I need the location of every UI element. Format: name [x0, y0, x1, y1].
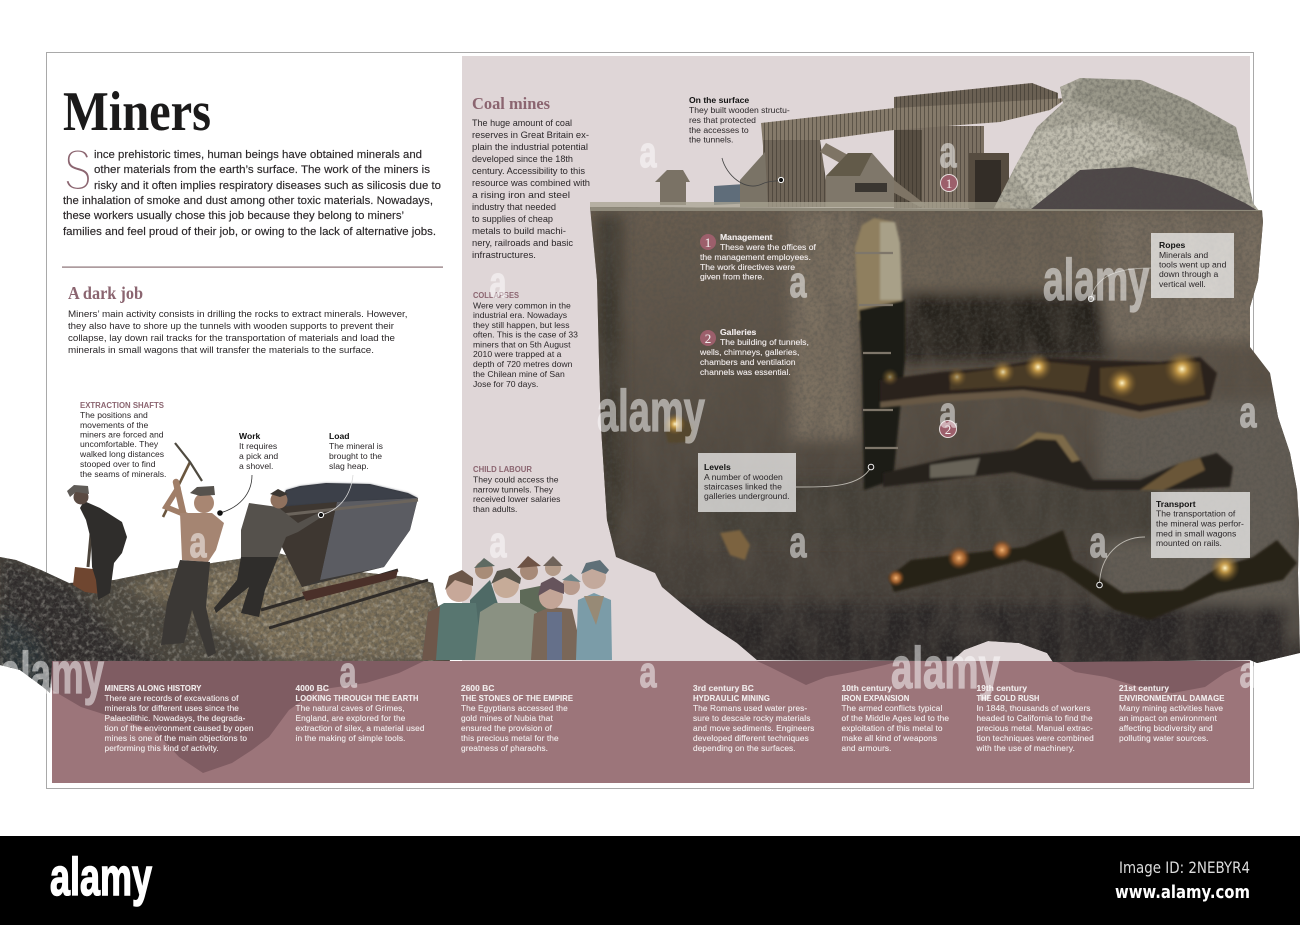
intro text block: ince prehistoric times, human beings have obtained minerals and	[94, 149, 422, 161]
coal heap	[278, 483, 418, 507]
timeline: miners along history: Palaeolithic. Nowadays, the degrada-	[104, 713, 246, 723]
callout: galleries: Galleries	[720, 327, 757, 337]
callout: galleries: chambers and ventilation	[700, 357, 796, 367]
illustration: surface buildings	[590, 75, 1265, 215]
ground and spoil heap	[0, 550, 460, 700]
timeline: 21st century: affecting biodiversity and	[1119, 723, 1213, 733]
callout: ropes: vertical well.	[1159, 279, 1206, 289]
intro text block: these workers usually chose this job because they belong to miners’	[63, 210, 404, 222]
text block: coal mines: a rising iron and steel	[472, 190, 570, 200]
left tower	[763, 140, 830, 207]
callout: transport: The transportation of	[1156, 508, 1236, 518]
text block: child labour: They could access the	[473, 474, 559, 484]
timeline: 3rd century BC: HYDRAULIC MINING	[693, 693, 770, 703]
illustration: miner with pick	[161, 443, 224, 657]
callout: extraction shafts: EXTRACTION SHAFTS	[80, 400, 164, 410]
callout: ropes: tools went up and	[1159, 260, 1227, 270]
timeline: 2600 BC: The Egyptians accessed the	[461, 703, 568, 713]
callout: extraction shafts: stooped over to find	[80, 459, 156, 469]
callout: ropes: Minerals and	[1159, 250, 1208, 260]
illustration: child miners group	[422, 556, 612, 660]
callout: work	[217, 431, 278, 516]
callout: on the surface: On the surface	[689, 95, 749, 105]
callout: levels	[698, 453, 874, 512]
callout: extraction shafts: the seams of minerals.	[80, 469, 166, 479]
right tower	[894, 126, 984, 208]
timeline: 19th century	[976, 683, 1094, 753]
stock watermarks: a	[640, 648, 657, 697]
water tank	[714, 184, 756, 205]
vertical shaft	[855, 218, 905, 490]
intro text block	[63, 138, 441, 238]
rails	[261, 570, 428, 628]
text block: a dark job	[68, 309, 407, 355]
callout: extraction shafts: uncomfortable. They	[80, 439, 159, 449]
callout: transport	[1097, 492, 1250, 588]
marker: 1 on building: 1	[946, 176, 952, 191]
timeline: 4000 BC: The natural caves of Grimes,	[296, 703, 405, 713]
callout: levels: A number of wooden	[704, 472, 783, 482]
timeline: miners along history: minerals for different uses since the	[104, 703, 239, 713]
rock texture	[585, 200, 1300, 670]
timeline: 10th century: make all kind of weapons	[842, 733, 937, 743]
text block: child labour: than adults.	[473, 504, 517, 514]
text block: coal mines: reserves in Great Britain ex-	[472, 130, 589, 140]
callout: galleries: 2	[705, 331, 711, 346]
timeline: 3rd century BC: sure to descale rocky materials	[693, 713, 810, 723]
stock watermarks: a	[640, 128, 657, 177]
panel: coal mines background	[462, 56, 1250, 661]
text block: coal mines: plain the industrial potential	[472, 142, 588, 152]
callout: management: given from there.	[700, 272, 764, 282]
text block: child labour: received lower salaries	[473, 494, 560, 504]
timeline: miners along history: MINERS ALONG HISTORY	[104, 683, 202, 693]
timeline: 2600 BC	[461, 683, 573, 753]
text block: coal mines: to supplies of cheap	[472, 214, 553, 224]
timeline: 10th century: of the Middle Ages led to the	[842, 713, 949, 723]
intro text block: other materials from the earth’s surface. The work of the miners is	[94, 164, 430, 176]
callout: management	[700, 232, 816, 282]
text block: collapses: often. This is the case of 33	[473, 330, 578, 340]
timeline: miners along history: There are records of excavations of	[104, 693, 239, 703]
callout: ropes: Ropes	[1159, 240, 1185, 250]
intro text block: the inhalation of smoke and dust among other toxic materials. Nowadays,	[63, 195, 433, 207]
timeline: 10th century: The armed conflicts typical	[842, 703, 942, 713]
text block: collapses: COLLAPSES	[473, 290, 519, 300]
footer bar	[0, 836, 1300, 925]
callout: galleries: The building of tunnels,	[720, 337, 809, 347]
callout: management: 1	[705, 235, 711, 250]
rock shadows on the timeline band	[50, 661, 1250, 773]
timeline: 21st century: Many mining activities have	[1119, 703, 1223, 713]
stock watermarks: a	[490, 258, 507, 307]
callout: load: brought to the	[329, 451, 382, 461]
timeline: 21st century: an impact on environment	[1119, 713, 1217, 723]
stock watermarks: alamy	[597, 379, 705, 444]
text block: collapses: 2010 were trapped at a	[473, 349, 562, 359]
text block: collapses: Were very common in the	[473, 300, 571, 310]
callout: levels: staircases linked the	[704, 482, 782, 492]
stock watermarks: a	[490, 518, 507, 567]
upper building	[894, 83, 1058, 112]
text block: a dark job: Miners’ main activity consists in drilling the rocks to extract minerals. However,	[68, 309, 407, 319]
timeline: 19th century: precious metal. Manual extrac-	[976, 723, 1093, 733]
footer logo: alamy	[50, 848, 152, 907]
text block: coal mines: industry that needed	[472, 202, 556, 212]
covered bridge	[761, 98, 1067, 146]
gallery 1	[880, 357, 1217, 412]
callout: on the surface: the tunnels.	[689, 134, 733, 144]
timeline: 21st century: 21st century	[1119, 683, 1169, 693]
timeline: 19th century: tion techniques were combined	[976, 733, 1094, 743]
drop cap: S	[63, 138, 92, 203]
marker: 2 in gallery: 2	[945, 422, 951, 437]
back row	[470, 556, 581, 640]
text block: coal mines: The huge amount of coal	[472, 118, 572, 128]
timeline: 10th century	[842, 683, 949, 753]
stock watermarks: alamy	[0, 641, 104, 706]
timeline: 10th century: exploitation of this metal to	[842, 723, 943, 733]
callout: extraction shafts: miners are forced and	[80, 430, 164, 440]
timeline: 2600 BC: ensured the provision of	[461, 723, 553, 733]
text block: a dark job: minerals in small wagons that will transfer the materials to the surface.	[68, 345, 374, 355]
footer image id: Image ID: 2NEBYR4	[1119, 858, 1250, 877]
callout: load: The mineral is	[329, 441, 383, 451]
timeline: 21st century	[1119, 683, 1225, 743]
callout: galleries	[699, 327, 809, 377]
callout: extraction shafts: walked long distances	[79, 449, 164, 459]
callout: load	[318, 431, 383, 518]
callout: extraction shafts: movements of the	[80, 420, 149, 430]
timeline: 4000 BC: in the making of simple tools.	[296, 733, 406, 743]
callout: load: Load	[329, 431, 350, 441]
callout: on the surface: They built wooden structu-	[689, 105, 790, 115]
stock watermarks: a	[790, 518, 807, 567]
timeline: 3rd century BC: The Romans used water pres-	[693, 703, 807, 713]
conveyor	[820, 143, 926, 207]
timeline: 10th century: and armours.	[842, 743, 892, 753]
callout: extraction shafts: The positions and	[80, 410, 148, 420]
callout: management: The work directives were	[700, 262, 795, 272]
timeline: 2600 BC: 2600 BC	[461, 683, 494, 693]
timeline: miners along history: tion of the environment caused by open	[104, 723, 254, 733]
illustration: mine wagon	[261, 483, 428, 628]
gallery 2	[883, 432, 1233, 490]
small house	[826, 153, 894, 207]
callout: levels: Levels	[704, 462, 731, 472]
stock watermarks: a	[940, 128, 957, 177]
callout: management: Management	[720, 232, 773, 242]
text block: collapses: Jose for 70 days.	[473, 379, 538, 389]
text block: coal mines: developed since the 18th	[472, 154, 573, 164]
stock watermarks: a	[1240, 648, 1257, 697]
text block: a dark job: they also have to shore up the tunnels with wooden supports to prevent their	[68, 321, 394, 331]
heading: coal mines: Coal mines	[472, 94, 550, 113]
timeline: 19th century: headed to California to find the	[976, 713, 1093, 723]
timeline: miners along history: mines is one of the main objections to	[104, 733, 247, 743]
text block: collapses	[473, 290, 578, 389]
stock watermarks: a	[940, 388, 957, 437]
text block: a dark job: collapse, lay down rail tracks for the transportation of materials and load the	[68, 333, 395, 343]
callout: on the surface	[689, 95, 790, 186]
ground strip	[590, 202, 1010, 209]
marker: 1 on building	[940, 174, 958, 192]
timeline: 19th century: THE GOLD RUSH	[976, 693, 1040, 703]
door house	[969, 153, 1009, 210]
callout: work: Work	[239, 431, 261, 441]
footer url: www.alamy.com	[1115, 882, 1250, 903]
callout: transport: the mineral was perfor-	[1156, 518, 1244, 528]
text block: child labour	[473, 464, 560, 514]
gallery 3	[889, 530, 1297, 620]
hut	[655, 170, 690, 205]
text block: child labour: narrow tunnels. They	[473, 484, 554, 494]
text block: collapses: they still happen, but less	[473, 320, 570, 330]
callout: transport: Transport	[1156, 499, 1196, 509]
callout: load: slag heap.	[329, 461, 369, 471]
timeline: 10th century: IRON EXPANSION	[842, 693, 910, 703]
callout: galleries: wells, chimneys, galleries,	[699, 347, 799, 357]
marker: 2 in gallery	[940, 420, 956, 438]
callout: on the surface: the accesses to	[689, 125, 749, 135]
timeline: 21st century: ENVIRONMENTAL DAMAGE	[1119, 693, 1225, 703]
timeline: 4000 BC: LOOKING THROUGH THE EARTH	[296, 693, 418, 703]
timeline: 3rd century BC: 3rd century BC	[693, 683, 754, 693]
text block: child labour: CHILD LABOUR	[473, 464, 533, 474]
stock watermarks: a	[1240, 388, 1257, 437]
timeline: 19th century: In 1848, thousands of workers	[976, 703, 1091, 713]
illustration: miner with shovel	[67, 485, 127, 600]
front row kids	[422, 560, 612, 660]
timeline: 4000 BC: England, are explored for the	[296, 713, 406, 723]
timeline: miners along history	[104, 683, 254, 753]
callout: work: It requires	[239, 441, 277, 451]
stock watermarks: alamy	[1043, 248, 1149, 313]
timeline: 21st century: polluting water sources.	[1119, 733, 1209, 743]
timeline: 3rd century BC	[693, 683, 814, 753]
callout: management: the management employees.	[700, 252, 811, 262]
panel: timeline band	[52, 661, 1250, 783]
callout: ropes	[1088, 233, 1234, 302]
callout: work: a shovel.	[239, 461, 273, 471]
text block: coal mines: nery, railroads and basic	[472, 238, 573, 248]
text block: collapses: the Chilean mine of San	[473, 369, 565, 379]
timeline: 3rd century BC: and move sediments. Engineers	[693, 723, 814, 733]
timeline: 2600 BC: this precious metal for the	[461, 733, 559, 743]
wagon body	[278, 498, 418, 587]
text block: coal mines: infrastructures.	[472, 250, 536, 260]
text block: coal mines: resource was combined with	[472, 178, 590, 188]
timeline: 4000 BC: extraction of silex, a material used	[296, 723, 425, 733]
timeline: 3rd century BC: depending on the surfaces.	[693, 743, 796, 753]
text block: collapses: miners that on 5th August	[473, 340, 571, 350]
callout: work: a pick and	[239, 451, 278, 461]
illustration: miner pushing wagon	[214, 489, 320, 617]
callout: transport: med in small wagons	[1156, 528, 1236, 538]
timeline: 2600 BC: greatness of pharaohs.	[461, 743, 548, 753]
text block: coal mines: century. Accessibility to this	[472, 166, 585, 176]
callout: transport: mounted on rails.	[1156, 538, 1222, 548]
intro text block: families and feel proud of their job, or owing to the lack of alternative jobs.	[63, 226, 436, 238]
timeline: 4000 BC	[296, 683, 425, 743]
callout: ropes: down through a	[1159, 269, 1218, 279]
illustration: rock cross-section	[585, 200, 1300, 670]
stock watermarks: alamy	[891, 636, 1000, 701]
lit niches	[664, 416, 694, 443]
timeline: 10th century: 10th century	[842, 683, 892, 693]
stock watermarks: a	[190, 518, 207, 567]
timeline: 2600 BC: THE STONES OF THE EMPIRE	[461, 693, 573, 703]
heading: a dark job: A dark job	[68, 283, 143, 303]
timeline: 2600 BC: gold mines of Nubia that	[461, 713, 553, 723]
callout: on the surface: res that protected	[689, 115, 756, 125]
text block: coal mines	[472, 118, 590, 260]
callout: management: These were the offices of	[720, 242, 816, 252]
timeline: miners along history: performing this kind of activity.	[104, 743, 219, 753]
rock lights	[666, 414, 684, 434]
text block: collapses: depth of 720 metres down	[473, 359, 573, 369]
title: Miners	[63, 81, 211, 143]
timeline: 19th century: 19th century	[976, 683, 1027, 693]
timeline: 19th century: with the use of machinery.	[976, 743, 1075, 753]
callout: extraction shafts	[79, 400, 166, 479]
timeline: 4000 BC: 4000 BC	[296, 683, 329, 693]
callout: levels: galleries underground.	[704, 491, 790, 501]
text block: coal mines: metals to build machi-	[472, 226, 566, 236]
intro text block: risky and it often implies respiratory diseases such as silicosis due to	[94, 180, 441, 192]
text block: collapses: industrial era. Nowadays	[473, 310, 567, 320]
frame	[46, 52, 1254, 788]
callout: galleries: channels was essential.	[700, 367, 791, 377]
stock watermarks: a	[340, 648, 357, 697]
spoil mound	[990, 75, 1265, 215]
stock watermarks: a	[790, 258, 807, 307]
stock watermarks: a	[1090, 518, 1107, 567]
timeline: 3rd century BC: developed different techniques	[693, 733, 809, 743]
stock watermarks	[0, 128, 1257, 706]
